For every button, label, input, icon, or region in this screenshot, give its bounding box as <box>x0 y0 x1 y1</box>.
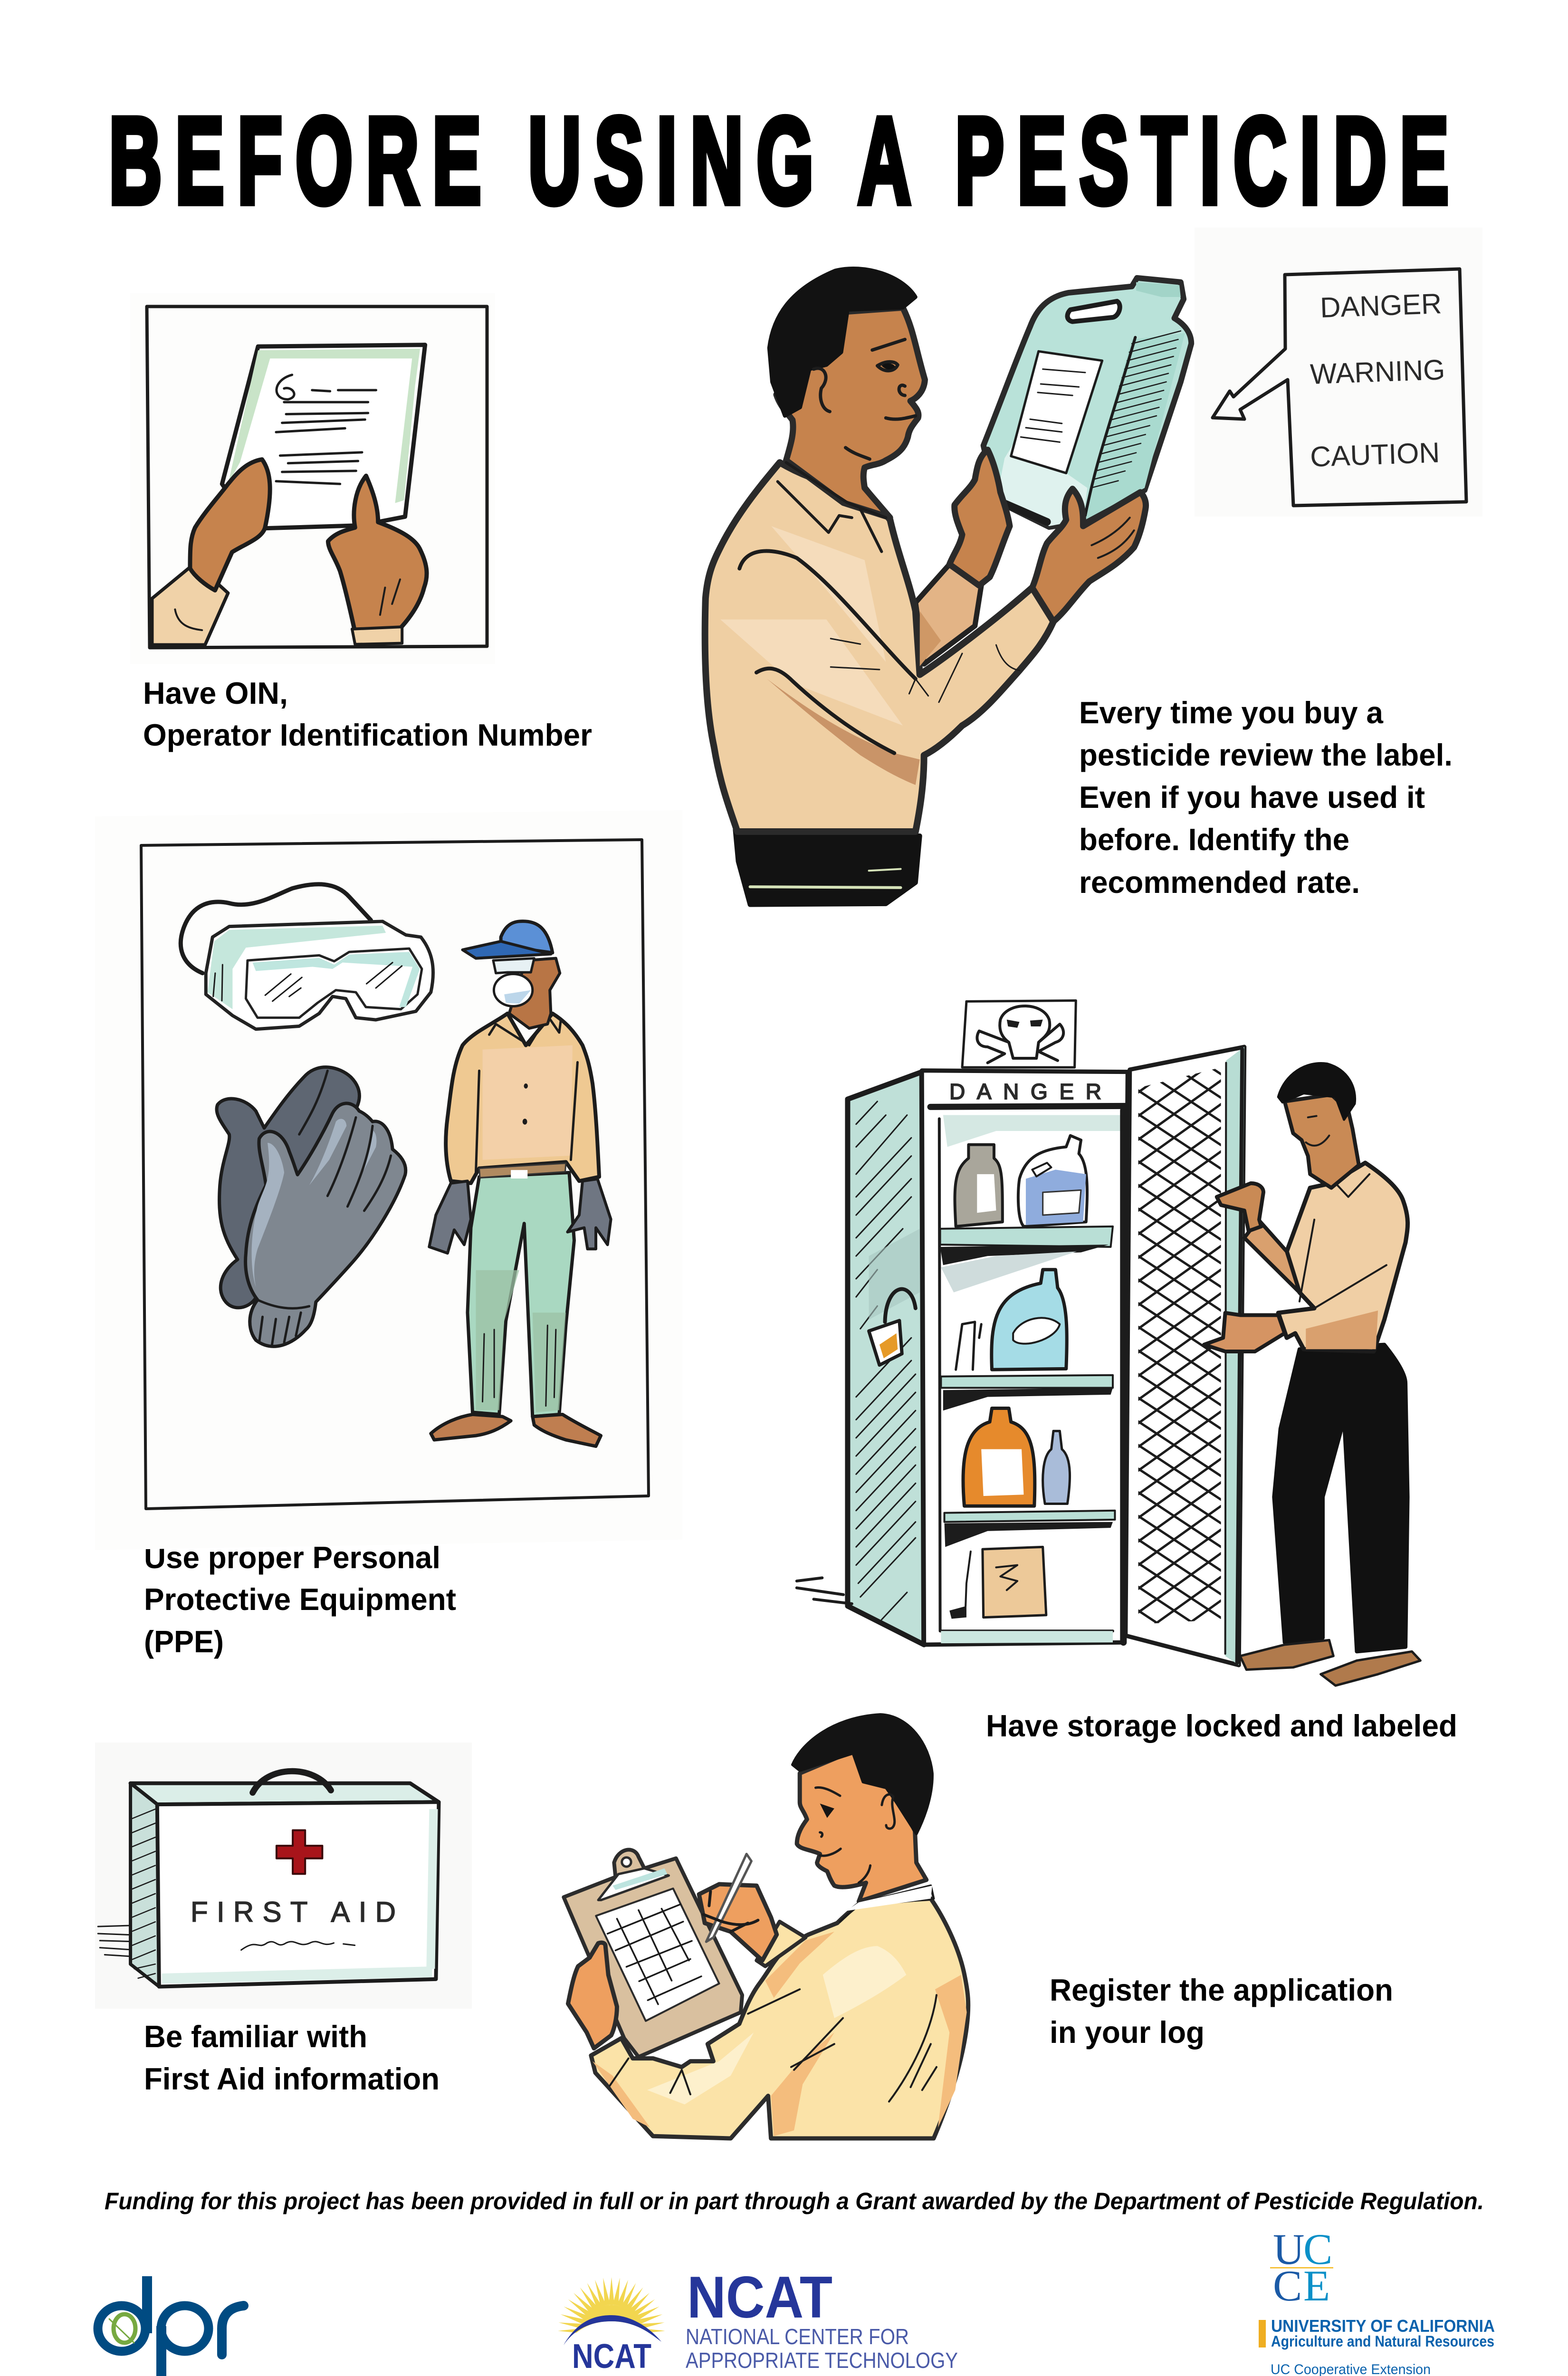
far hand <box>949 450 1010 585</box>
head <box>797 1750 927 1901</box>
horizon arc <box>564 2315 661 2345</box>
cabinet feet scribble <box>797 1578 852 1604</box>
padlock <box>869 1289 916 1365</box>
first aid lettering: FIRST AID <box>191 1896 396 1928</box>
caption: protective equipment: Protective Equipment <box>144 1582 456 1617</box>
panel: danger warning caution sign <box>1195 228 1482 517</box>
caption: operator identification number: Have OIN, <box>143 676 288 710</box>
man opening door <box>1204 1063 1420 1686</box>
caption: register application: Register the application <box>1050 1973 1393 2007</box>
logo: UC Cooperative Extension: Agriculture and Natural Resources <box>1271 2333 1494 2350</box>
logo: UC Cooperative Extension: C <box>1303 2225 1332 2273</box>
caption: protective equipment <box>144 1540 456 1659</box>
shadow scribble <box>98 1926 136 1956</box>
logo text: NATIONAL CENTER FOR <box>686 2324 909 2349</box>
caption: review the label: Even if you have used it <box>1079 780 1425 814</box>
caption: review the label: pesticide review the label. <box>1079 738 1453 772</box>
sign text: CAUTION <box>1310 437 1440 473</box>
caption: first aid: Be familiar with <box>144 2019 367 2054</box>
sleeve cuff <box>756 1922 805 1966</box>
trousers <box>735 830 920 905</box>
logo text: APPROPRIATE TECHNOLOGY <box>686 2348 958 2373</box>
cabinet danger lettering: DANGER <box>949 1079 1101 1104</box>
face and collar details <box>816 1787 934 1922</box>
logo text: NCAT <box>687 2265 832 2330</box>
hair <box>769 268 916 416</box>
sun rays <box>558 2277 665 2334</box>
left hand <box>568 1943 617 2048</box>
door lattice <box>1138 1069 1221 1623</box>
caption: operator identification number <box>143 676 592 752</box>
caption: first aid: First Aid information <box>144 2061 440 2096</box>
logo: dpr <box>98 2276 244 2376</box>
near hand <box>1032 489 1146 622</box>
sign text: DANGER <box>1319 287 1442 324</box>
logo text: NCAT <box>572 2338 651 2376</box>
shelves <box>940 1226 1115 1643</box>
cabinet front <box>922 1071 1128 1645</box>
illustration: first aid kit <box>95 1743 472 2009</box>
sign text: WARNING <box>1310 354 1445 390</box>
panel frame <box>147 307 487 648</box>
title: BEFORE USING A PESTICIDE <box>109 92 1449 230</box>
caption: review the label <box>1079 695 1453 900</box>
panel: personal protective equipment <box>95 810 682 1550</box>
jug <box>984 278 1191 527</box>
worker in PPE <box>429 921 611 1446</box>
panel: operator identification document <box>130 293 495 664</box>
writing hand and pen <box>699 1854 777 1961</box>
hair <box>793 1715 932 1834</box>
caption: protective equipment: (PPE) <box>144 1624 224 1659</box>
document and hands <box>152 345 427 645</box>
caption: review the label: Every time you buy a <box>1079 695 1384 730</box>
goggles <box>181 884 433 1029</box>
panel frame <box>141 840 649 1509</box>
logo: UC Cooperative Extension: C <box>1273 2261 1302 2310</box>
logo: UC Cooperative Extension: UNIVERSITY OF CALIFORNIA <box>1271 2316 1495 2336</box>
sign outline with arrow <box>1213 269 1466 506</box>
illustration: locked storage cabinet and man <box>797 1000 1420 1686</box>
logo: UC Cooperative Extension <box>1259 2225 1495 2376</box>
caption: review the label: before. Identify the <box>1079 822 1349 857</box>
funding note: Funding for this project has been provided in full or in part through a Grant awarded by the Department of Pesticide Regulation. <box>105 2188 1484 2214</box>
kit top <box>131 1783 439 1804</box>
gloves <box>217 1067 406 1346</box>
facial features <box>814 339 916 459</box>
open door <box>1126 1020 1244 1683</box>
white gap between forearms <box>979 526 1047 624</box>
bottles <box>949 1136 1087 1619</box>
logo: UC Cooperative Extension: U <box>1273 2225 1304 2273</box>
handle <box>253 1771 331 1792</box>
shirt <box>591 1898 968 2138</box>
kit side <box>131 1783 159 1987</box>
skull sign <box>962 1000 1076 1067</box>
caption: protective equipment: Use proper Personal <box>144 1540 440 1575</box>
cabinet side <box>848 1072 924 1645</box>
shirt <box>705 462 1053 832</box>
clipboard <box>564 1850 742 2057</box>
caption: register application <box>1050 1973 1393 2050</box>
logo: NCAT <box>558 2265 958 2376</box>
collar <box>778 462 886 552</box>
illustration: man reading jug label <box>705 268 1191 905</box>
logo: UC Cooperative Extension: E <box>1303 2261 1330 2310</box>
far sleeve <box>916 565 981 664</box>
illustration: man writing on clipboard <box>564 1715 968 2138</box>
caption: review the label: recommended rate. <box>1079 865 1360 900</box>
scribble <box>241 1942 355 1950</box>
sign text <box>1310 287 1445 473</box>
red cross <box>277 1830 322 1874</box>
logo text <box>572 2265 958 2376</box>
caption: first aid <box>144 2019 440 2096</box>
caption: register application: in your log <box>1050 2015 1205 2050</box>
caption: locked storage: Have storage locked and labeled <box>986 1708 1457 1743</box>
caption: operator identification number: Operator Identification Number <box>143 718 592 752</box>
kit front <box>157 1802 439 1987</box>
head <box>776 307 925 517</box>
